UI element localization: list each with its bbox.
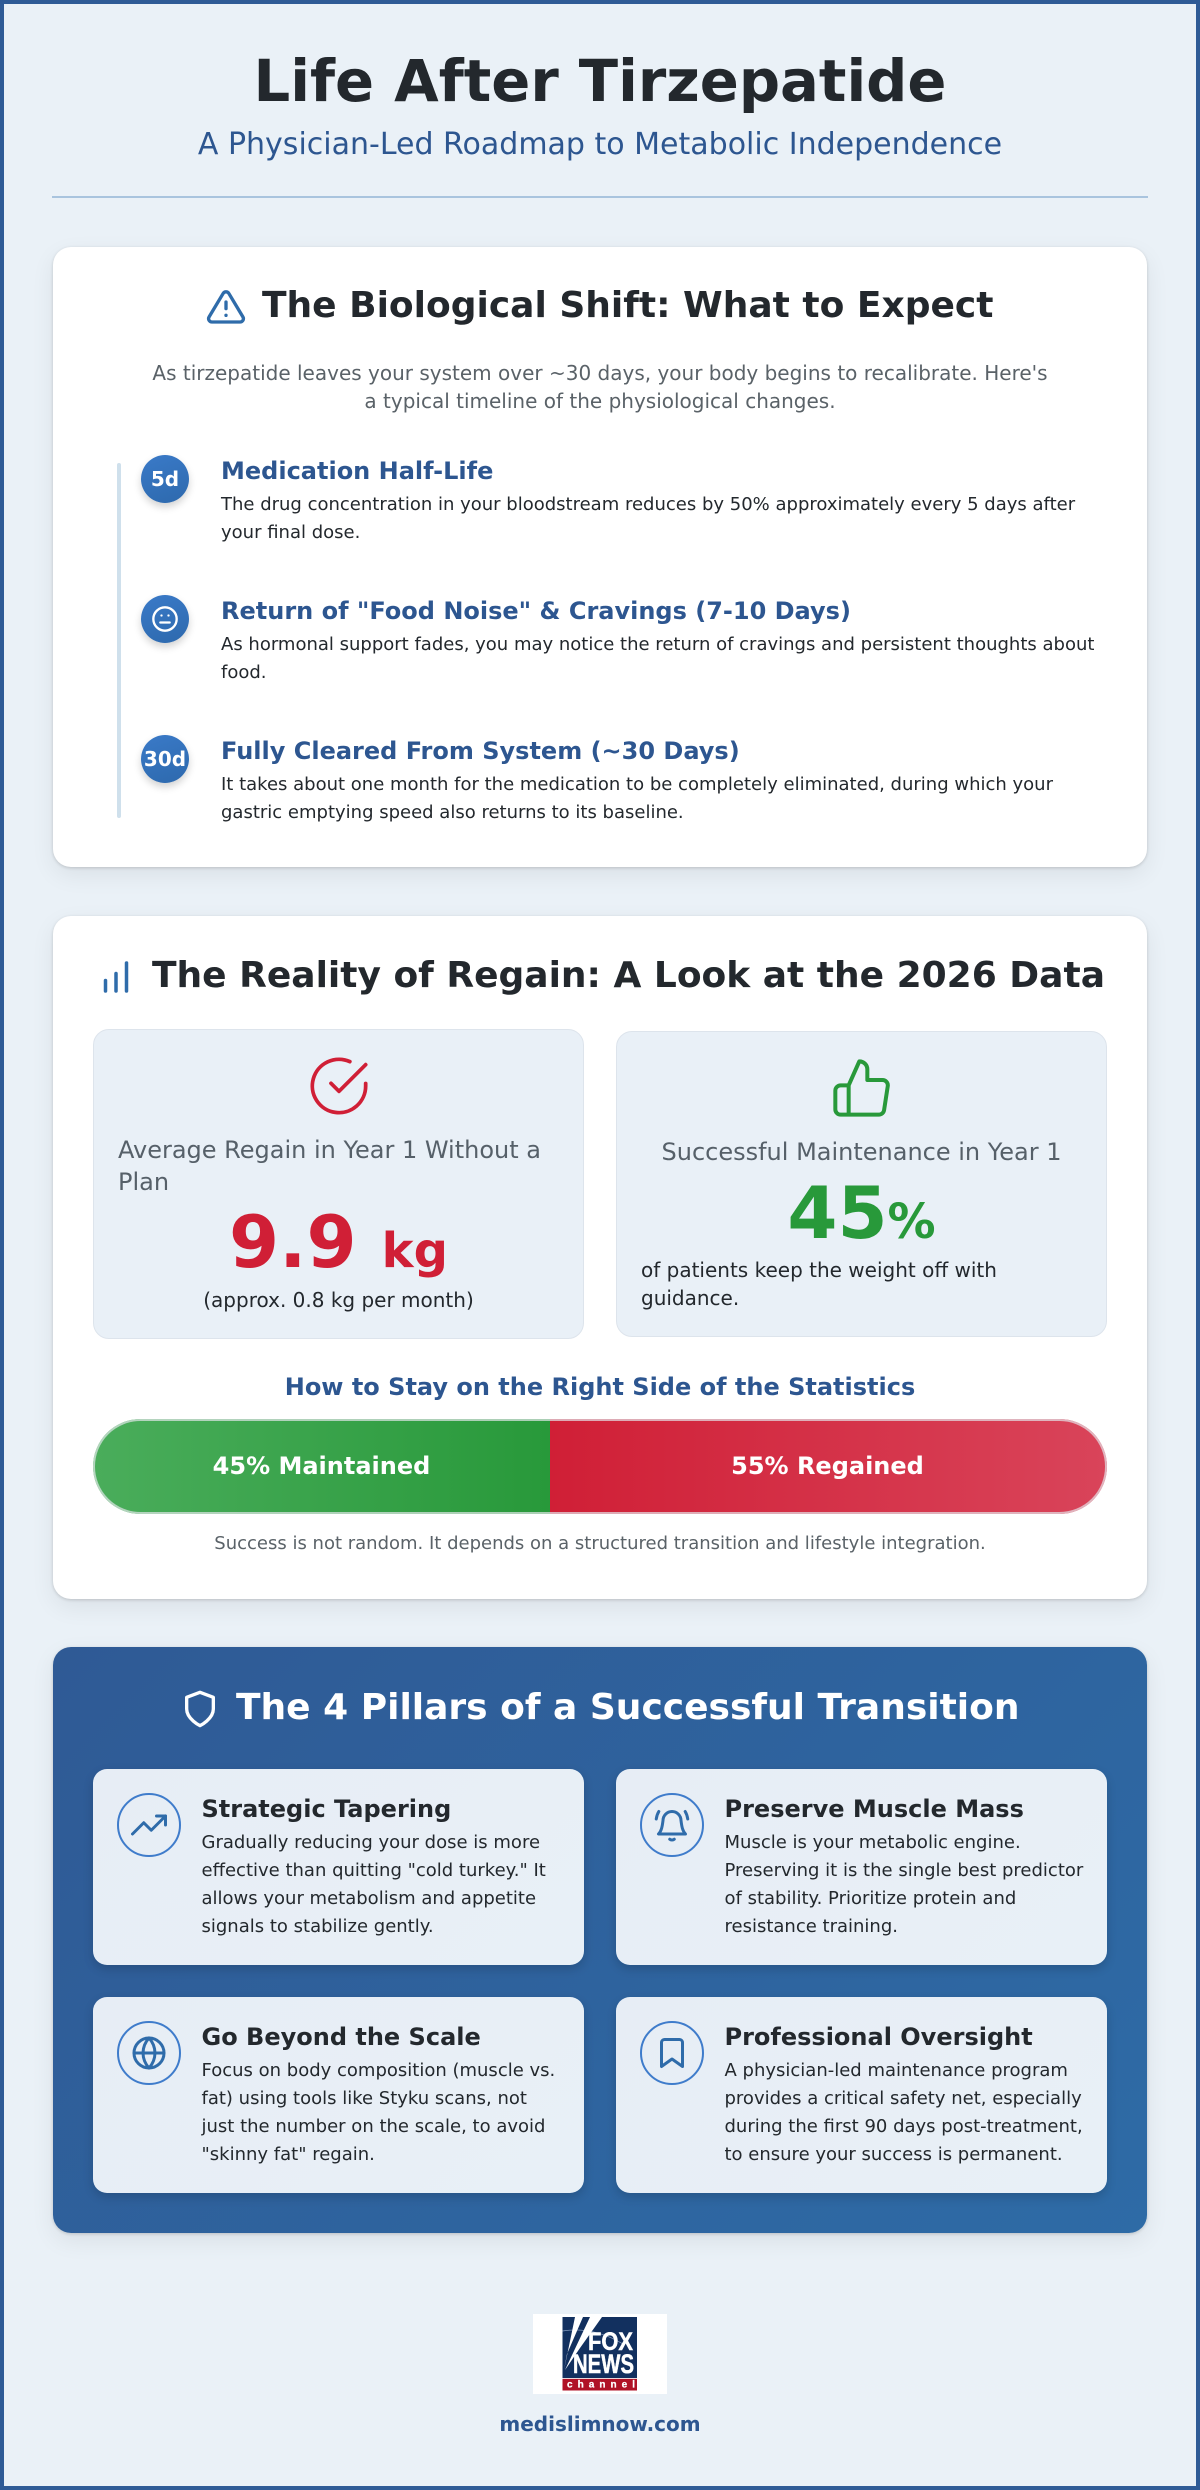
stat card: successful maintenance bbox=[616, 1031, 1107, 1337]
pillar description: during the first 90 days post-treatment, bbox=[724, 2116, 1083, 2136]
pillar description: Preserving it is the single best predictor bbox=[724, 1860, 1083, 1880]
heading: reality of regain: The Reality of Regain: A Look at the 2026 Data bbox=[152, 955, 1105, 996]
pillar title: Go Beyond the Scale bbox=[202, 2023, 481, 2051]
stat note bbox=[641, 1258, 997, 1310]
stat note: guidance. bbox=[641, 1286, 739, 1310]
step description: food. bbox=[221, 662, 267, 682]
subheading: How to Stay on the Right Side of the Statistics bbox=[285, 1372, 915, 1400]
pillar description: effective than quitting "cold turkey." It bbox=[202, 1860, 546, 1880]
pillar title: Preserve Muscle Mass bbox=[724, 1795, 1024, 1823]
step title: Return of "Food Noise" & Cravings (7-10 Days) bbox=[221, 597, 851, 625]
icon: bar chart bbox=[104, 961, 128, 993]
icon: bookmark bbox=[640, 2021, 704, 2085]
logo: fox news channel bbox=[533, 2314, 667, 2394]
pillar: professional oversight bbox=[616, 1997, 1107, 2193]
icon: thumbs up bbox=[833, 1059, 890, 1117]
segment: maintained: 45% Maintained bbox=[213, 1452, 430, 1480]
stat label: Successful Maintenance in Year 1 bbox=[662, 1138, 1061, 1166]
intro text: a typical timeline of the physiological changes. bbox=[364, 389, 836, 413]
segment: regained: 55% Regained bbox=[731, 1452, 924, 1480]
stat value: 9.9 kg: 9.9 kg bbox=[229, 1200, 448, 1284]
pillar: go beyond the scale bbox=[93, 1997, 584, 2193]
pillar description: just the number on the scale, to avoid bbox=[202, 2116, 545, 2136]
pillar description bbox=[724, 2060, 1083, 2164]
badge: 5d: 5d bbox=[151, 467, 179, 491]
step title: Fully Cleared From System (~30 Days) bbox=[221, 737, 740, 765]
segment: regained bbox=[550, 1419, 1107, 1514]
segment: maintained bbox=[93, 1419, 550, 1514]
pillar description: allows your metabolism and appetite bbox=[202, 1888, 536, 1908]
icon: check circle bbox=[310, 1058, 368, 1114]
pillar: strategic tapering bbox=[93, 1769, 584, 1965]
stat value: 45%: 45% bbox=[787, 1171, 936, 1255]
pillar description: A physician-led maintenance program bbox=[724, 2060, 1068, 2080]
pillar description: "skinny fat" regain. bbox=[202, 2144, 375, 2164]
stat label bbox=[118, 1136, 541, 1196]
icon: shield bbox=[185, 1690, 215, 1728]
timeline step: half-life bbox=[138, 455, 1076, 542]
step description: As hormonal support fades, you may notice the return of cravings and persistent thoughts about bbox=[221, 634, 1094, 654]
pillar description: to ensure your success is permanent. bbox=[724, 2144, 1063, 2164]
icon: trending up bbox=[117, 1793, 181, 1857]
panel: the 4 pillars bbox=[53, 1647, 1147, 2233]
step description bbox=[221, 774, 1053, 822]
pillar description: provides a critical safety net, especially bbox=[724, 2088, 1082, 2108]
badge: 30d: 30d bbox=[144, 747, 186, 771]
timeline step: fully cleared bbox=[138, 735, 1053, 822]
stat label: Plan bbox=[118, 1168, 169, 1196]
step description bbox=[221, 634, 1094, 682]
step description: The drug concentration in your bloodstream reduces by 50% approximately every 5 days after bbox=[221, 494, 1075, 514]
intro text bbox=[152, 361, 1048, 413]
pillar description: Focus on body composition (muscle vs. bbox=[202, 2060, 555, 2080]
step description: gastric emptying speed also returns to its baseline. bbox=[221, 802, 684, 822]
step description: your final dose. bbox=[221, 522, 360, 542]
header bbox=[198, 48, 1002, 162]
pillar: preserve muscle mass bbox=[616, 1769, 1107, 1965]
step description: It takes about one month for the medication to be completely eliminated, during which your bbox=[221, 774, 1053, 794]
intro text: As tirzepatide leaves your system over ~30 days, your body begins to recalibrate. Here's bbox=[152, 361, 1048, 385]
badge: neutral face icon bbox=[141, 595, 189, 643]
logo: fox news channel: FOX bbox=[588, 2328, 633, 2356]
logo: fox news channel: channel bbox=[567, 2380, 635, 2391]
heading: biological shift: The Biological Shift: What to Expect bbox=[262, 285, 993, 326]
caption: Success is not random. It depends on a structured transition and lifestyle integration. bbox=[214, 1533, 986, 1554]
pillar title: Professional Oversight bbox=[724, 2023, 1033, 2051]
stat label: Average Regain in Year 1 Without a bbox=[118, 1136, 541, 1164]
pillar description: fat) using tools like Styku scans, not bbox=[202, 2088, 527, 2108]
footer website: medislimnow.com bbox=[499, 2412, 701, 2436]
pillar title: Strategic Tapering bbox=[202, 1795, 451, 1823]
icon: bell bbox=[640, 1793, 704, 1857]
heading: 4 pillars: The 4 Pillars of a Successful Transition bbox=[236, 1687, 1020, 1728]
split bar: 45% vs 55% bbox=[93, 1419, 1107, 1514]
badge: 30d bbox=[141, 735, 189, 783]
panel: the reality of regain bbox=[53, 916, 1147, 1599]
pillar description bbox=[201, 2060, 555, 2164]
logo: fox news channel: NEWS bbox=[573, 2349, 634, 2379]
title: Life After Tirzepatide bbox=[254, 48, 946, 115]
icon: warning triangle bbox=[206, 290, 246, 324]
pillar description bbox=[724, 1832, 1084, 1936]
pillar description: Muscle is your metabolic engine. bbox=[724, 1832, 1021, 1852]
subtitle: A Physician-Led Roadmap to Metabolic Independence bbox=[198, 127, 1002, 162]
badge: 5d bbox=[141, 455, 189, 503]
step title: Medication Half-Life bbox=[221, 457, 493, 485]
pillar description bbox=[202, 1832, 546, 1936]
pillar description: Gradually reducing your dose is more bbox=[202, 1832, 540, 1852]
stat card: average regain bbox=[93, 1029, 584, 1339]
stat note: (approx. 0.8 kg per month) bbox=[203, 1288, 474, 1312]
pillar description: of stability. Prioritize protein and bbox=[724, 1888, 1016, 1908]
panel: the biological shift bbox=[53, 247, 1147, 867]
icon: globe bbox=[117, 2021, 181, 2085]
stat note: of patients keep the weight off with bbox=[641, 1258, 997, 1282]
step description bbox=[220, 494, 1076, 542]
pillar description: resistance training. bbox=[724, 1916, 898, 1936]
timeline step: food noise bbox=[138, 595, 1094, 682]
pillar description: signals to stabilize gently. bbox=[202, 1916, 434, 1936]
